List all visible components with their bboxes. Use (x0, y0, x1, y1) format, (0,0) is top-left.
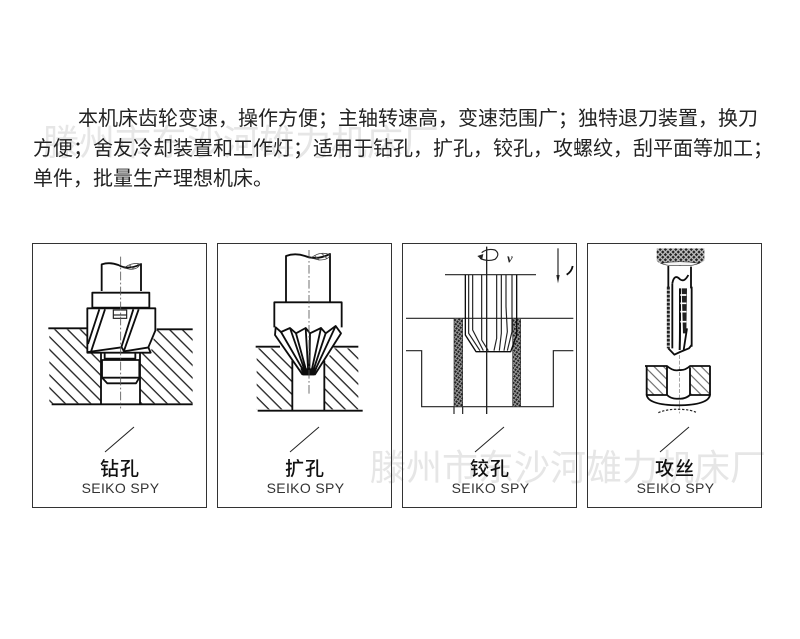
watermark: top: 滕州市东沙河雄力机床厂 (43, 122, 439, 163)
intro text block (33, 107, 773, 190)
diagram: tap (645, 248, 710, 413)
diagram: countersink tool (256, 250, 363, 411)
label: brand: SEIKO SPY (267, 480, 345, 496)
label: brand: SEIKO SPY (452, 480, 530, 496)
label: drilling: 钻孔 (100, 458, 140, 480)
diagram: drilling tool (48, 257, 193, 408)
panel: tapping (588, 244, 762, 508)
label: reaming: 铰孔 (470, 458, 510, 480)
panel: drilling (32, 244, 206, 508)
pointer line (105, 427, 134, 452)
intro text block: 单件，批量生产理想机床。 (33, 167, 273, 190)
pointer line (290, 427, 319, 452)
label: brand: SEIKO SPY (82, 480, 160, 496)
watermark: bottom: 滕州市东沙河雄力机床厂 (370, 447, 766, 488)
intro text block: 方便；舍友冷却装置和工作灯；适用于钻孔，扩孔，铰孔，攻螺纹，刮平面等加工； (33, 137, 773, 160)
pointer line (660, 427, 689, 452)
label: tapping: 攻丝 (655, 458, 695, 480)
diagram: reamer (406, 247, 573, 414)
symbol: cutting speed: v (507, 252, 513, 266)
panel: reaming (402, 244, 576, 508)
label: brand: SEIKO SPY (637, 480, 715, 496)
panel: reaming out (218, 244, 392, 508)
label: reaming out: 扩孔 (285, 458, 325, 480)
pointer line (475, 427, 504, 452)
intro text block: 本机床齿轮变速，操作方便；主轴转速高，变速范围广；独特退刀装置，换刀 (78, 107, 758, 130)
